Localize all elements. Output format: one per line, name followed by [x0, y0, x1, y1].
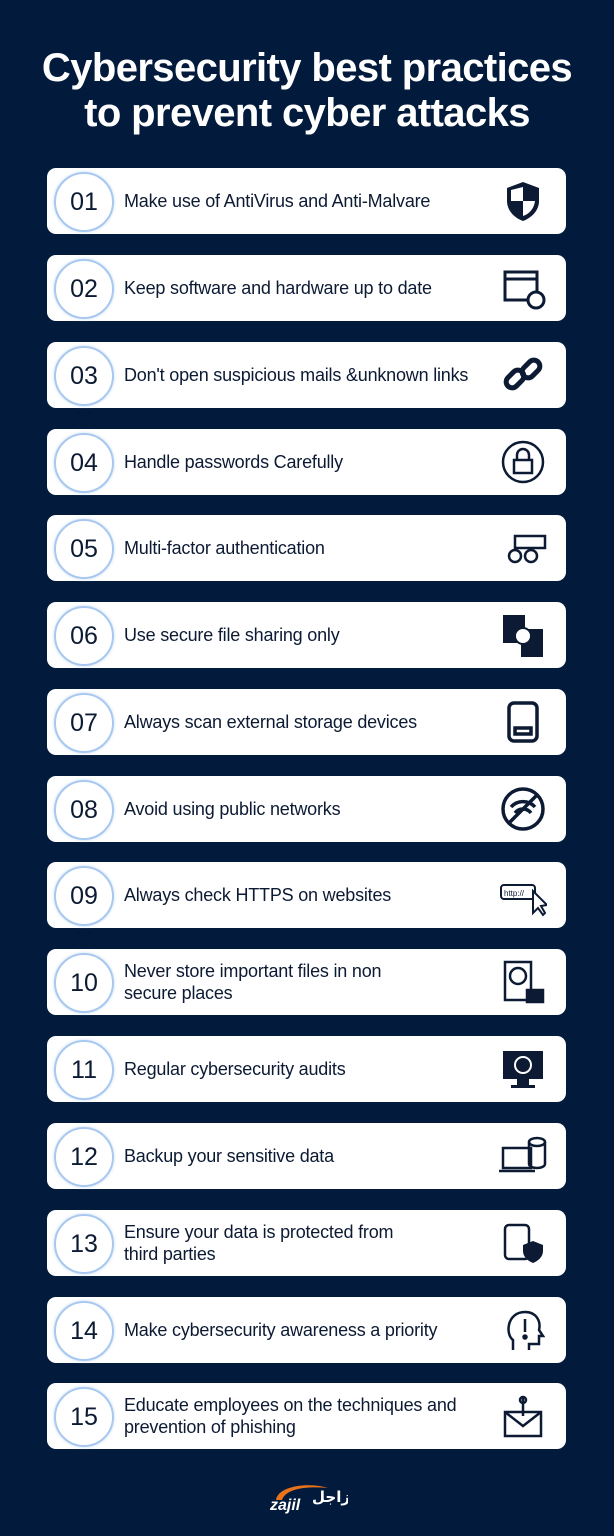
card 06: 06 — [70, 622, 98, 650]
title — [42, 46, 572, 135]
card 10: secure places — [124, 983, 232, 1003]
card 08: Avoid using public networks — [124, 799, 340, 819]
card 15: 15 — [70, 1403, 98, 1431]
card 09: http:// — [504, 889, 525, 898]
card 03: Don't open suspicious mails &unknown links — [124, 365, 468, 385]
card 11: Regular cybersecurity audits — [124, 1059, 346, 1079]
card 09: 09 — [70, 882, 98, 910]
card 03 — [47, 342, 566, 408]
card 02: Keep software and hardware up to date — [124, 278, 432, 298]
card 13: 13 — [70, 1230, 98, 1258]
card 02: 02 — [70, 275, 98, 303]
logo: zajil — [269, 1485, 348, 1514]
card 14: 14 — [70, 1317, 98, 1345]
card 14: Make cybersecurity awareness a priority — [124, 1320, 437, 1340]
card 07 — [47, 689, 566, 755]
card 15 — [47, 1383, 566, 1449]
card 13 — [47, 1210, 566, 1276]
card 11 — [47, 1036, 566, 1102]
card 03: 03 — [70, 362, 98, 390]
card 04: Handle passwords Carefully — [124, 452, 343, 472]
card 13: third parties — [124, 1244, 215, 1264]
card 02 — [47, 255, 566, 321]
card 11: 11 — [71, 1056, 97, 1084]
card 04: 04 — [70, 449, 98, 477]
card 05 — [47, 515, 566, 581]
card 09: Always check HTTPS on websites — [124, 885, 391, 905]
card 12: 12 — [70, 1143, 98, 1171]
card 10: Never store important files in non — [124, 961, 381, 981]
card 10: 10 — [70, 969, 98, 997]
card 09 — [47, 862, 566, 928]
card 05: Multi-factor authentication — [124, 538, 325, 558]
card 04 — [47, 429, 566, 495]
card 15: Educate employees on the techniques and — [124, 1395, 456, 1415]
card 01: 01 — [70, 188, 98, 216]
card 15: prevention of phishing — [124, 1417, 296, 1437]
card 05: 05 — [70, 535, 98, 563]
title: to prevent cyber attacks — [84, 91, 530, 135]
card 07: Always scan external storage devices — [124, 712, 417, 732]
card 12 — [47, 1123, 566, 1189]
card 01: Make use of AntiVirus and Anti-Malvare — [124, 191, 430, 211]
title: Cybersecurity best practices — [42, 46, 572, 90]
card 13: Ensure your data is protected from — [124, 1222, 393, 1242]
card 07: 07 — [70, 709, 98, 737]
card 14 — [47, 1297, 566, 1363]
card 06: Use secure file sharing only — [124, 625, 340, 645]
card 06 — [47, 602, 566, 668]
card 08 — [47, 776, 566, 842]
card 10 — [47, 949, 566, 1015]
card 08: 08 — [70, 796, 98, 824]
card 01 — [47, 168, 566, 234]
card 12: Backup your sensitive data — [124, 1146, 334, 1166]
logo: zajil: zajil — [269, 1497, 301, 1514]
